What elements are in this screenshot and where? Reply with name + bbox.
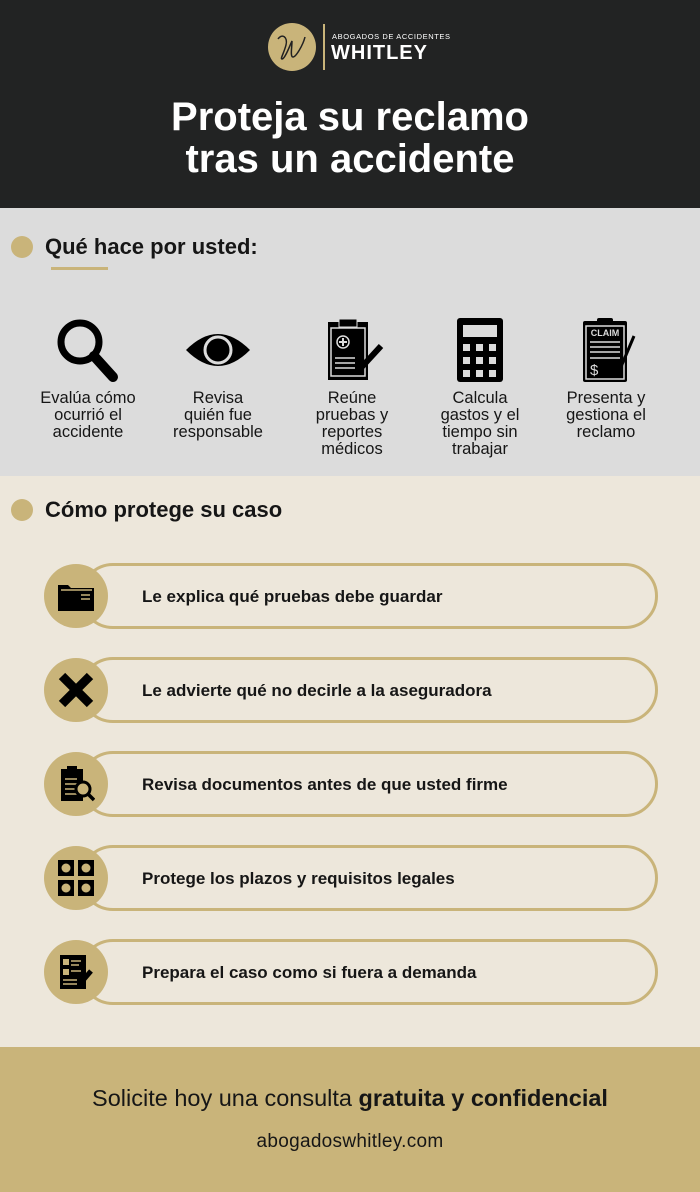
logo: [268, 23, 451, 71]
item: calcula: [441, 318, 519, 458]
row 2: [44, 657, 658, 723]
row 5: [44, 939, 658, 1005]
title: Proteja su reclamo: [171, 95, 529, 139]
item: evalua: accidente: [53, 423, 123, 441]
row 3: Revisa documentos antes de que usted firme: [142, 775, 508, 794]
row 3: [44, 751, 658, 817]
header background: [0, 0, 700, 208]
panel: how it protects: [0, 476, 700, 1047]
heading: Qué hace por usted: Qué hace por usted:: [45, 234, 258, 259]
item: reune: reportes: [322, 423, 382, 441]
title: [171, 95, 529, 181]
item: presenta: CLAIM: [591, 328, 619, 338]
item: evalua: Evalúa cómo: [40, 389, 136, 407]
item: presenta: $: [590, 362, 599, 379]
item: reune: médicos: [321, 440, 383, 458]
item: revisa: Revisa: [193, 389, 243, 407]
logo: WHITLEY: [331, 42, 428, 64]
footer: [0, 1047, 700, 1192]
item: reune: Reúne: [328, 389, 376, 407]
heading: Qué hace por usted: [11, 234, 258, 270]
item: revisa: responsable: [173, 423, 263, 441]
item: presenta: Presenta y: [567, 389, 645, 407]
row 1: [44, 563, 658, 629]
heading: Cómo protege su caso: Cómo protege su caso: [45, 497, 282, 522]
item: evalua: [40, 320, 136, 441]
item: evalua: ocurrió el: [54, 406, 122, 424]
website: abogadoswhitley.com: [256, 1131, 444, 1152]
title: tras un accidente: [185, 137, 514, 181]
item: presenta: [566, 318, 646, 441]
item: calcula: Calcula: [452, 389, 508, 407]
row 1: Le explica qué pruebas debe guardar: [142, 587, 442, 606]
item: calcula: trabajar: [452, 440, 508, 458]
item: calcula: tiempo sin: [442, 423, 518, 441]
row 2: Le advierte qué no decirle a la aseguradora: [142, 681, 492, 700]
row 4: Protege los plazos y requisitos legales: [142, 869, 455, 888]
item: revisa: [173, 334, 263, 441]
logo: ABOGADOS DE ACCIDENTES: [332, 32, 451, 41]
item: calcula: gastos y el: [441, 406, 519, 424]
call to action: Solicite hoy una consulta gratuita y confidencial: [92, 1085, 608, 1111]
row 5: Prepara el caso como si fuera a demanda: [142, 963, 476, 982]
item: revisa: quién fue: [184, 406, 252, 424]
row 4: [44, 845, 658, 911]
item: presenta: gestiona el: [566, 406, 646, 424]
item: reune: [316, 320, 388, 458]
item: presenta: reclamo: [577, 423, 635, 441]
item: reune: pruebas y: [316, 406, 388, 424]
panel: what it does: [0, 208, 700, 476]
